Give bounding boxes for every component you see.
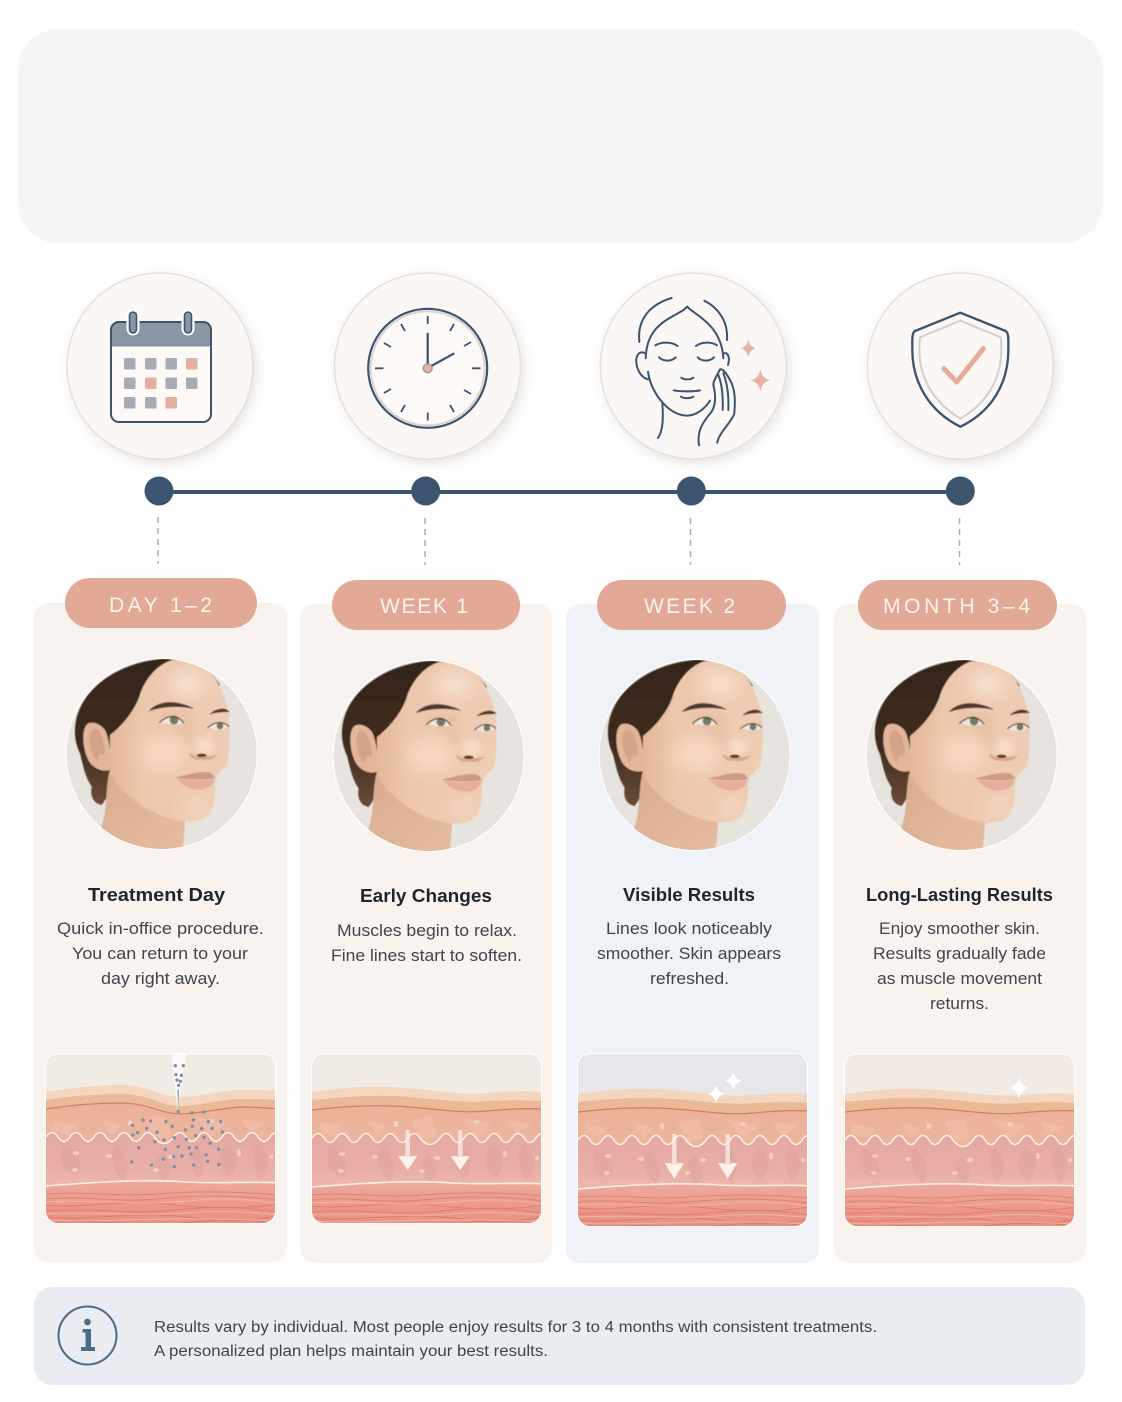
text: treatment day description: day right away. [101, 969, 220, 988]
text: long-lasting results description [873, 919, 1046, 1013]
panel: month 3-4 [834, 580, 1086, 1263]
panel: week 1 [300, 580, 552, 1263]
pill: month 3-4: MONTH 3–4 [883, 595, 1030, 618]
icon: shield with check [867, 273, 1053, 459]
portrait: week 1 [333, 660, 525, 855]
text: visible results description: smoother. Skin appears [597, 944, 781, 963]
skin diagram: injection [45, 1053, 276, 1224]
pill: week 2: WEEK 2 [644, 595, 735, 618]
text: early changes description: Muscles begin to relax. [337, 921, 517, 940]
heading: visible results: Visible Results [623, 884, 755, 905]
text: visible results description: refreshed. [650, 969, 729, 988]
portrait: week 2 [599, 659, 791, 854]
portrait: month 3-4 [866, 659, 1058, 854]
icon: clock [334, 273, 520, 459]
icon: info [58, 1306, 116, 1364]
timeline [144, 476, 975, 565]
footer note panel [34, 1287, 1085, 1385]
pill: month 3-4 [858, 580, 1057, 630]
skin diagram: lasting results [844, 1053, 1075, 1227]
text: visible results description [597, 919, 781, 988]
text: long-lasting results description: returns. [930, 994, 989, 1013]
text: early changes description: Fine lines start to soften. [331, 946, 522, 965]
text: footer note: Results vary by individual. Most people enjoy results for 3 to 4 months with consistent treatments. [154, 1319, 877, 1336]
pill: week 1: WEEK 1 [380, 595, 468, 618]
heading: long-lasting results: Long-Lasting Results [866, 884, 1053, 905]
text: long-lasting results description: as muscle movement [877, 969, 1042, 988]
text: treatment day description [57, 919, 264, 988]
pill: day 1-2 [65, 578, 257, 628]
text: treatment day description: Quick in-office procedure. [57, 919, 264, 938]
pill: week 1 [332, 580, 520, 630]
text: treatment day description: You can return to your [72, 944, 248, 963]
skin diagram: smoother skin [577, 1053, 808, 1227]
heading: early changes: Early Changes [360, 885, 492, 906]
text: long-lasting results description: Enjoy smoother skin. [879, 919, 1040, 938]
text: early changes description [331, 921, 522, 965]
panel: day 1-2 [34, 578, 287, 1262]
pill: week 2 [597, 580, 786, 630]
heading: treatment day: Treatment Day [88, 884, 226, 905]
panel: week 2 [566, 580, 819, 1263]
text: long-lasting results description: Results gradually fade [873, 944, 1046, 963]
header panel [18, 29, 1103, 243]
portrait: day 1-2 [66, 658, 258, 853]
text: visible results description: Lines look noticeably [606, 919, 773, 938]
text: footer note [154, 1319, 877, 1360]
icon: face with sparkles [600, 273, 786, 459]
skin diagram: relaxing muscles [311, 1053, 542, 1224]
text: footer note: A personalized plan helps maintain your best results. [154, 1343, 548, 1360]
icon: calendar [67, 273, 253, 459]
pill: day 1-2: DAY 1–2 [109, 594, 212, 617]
